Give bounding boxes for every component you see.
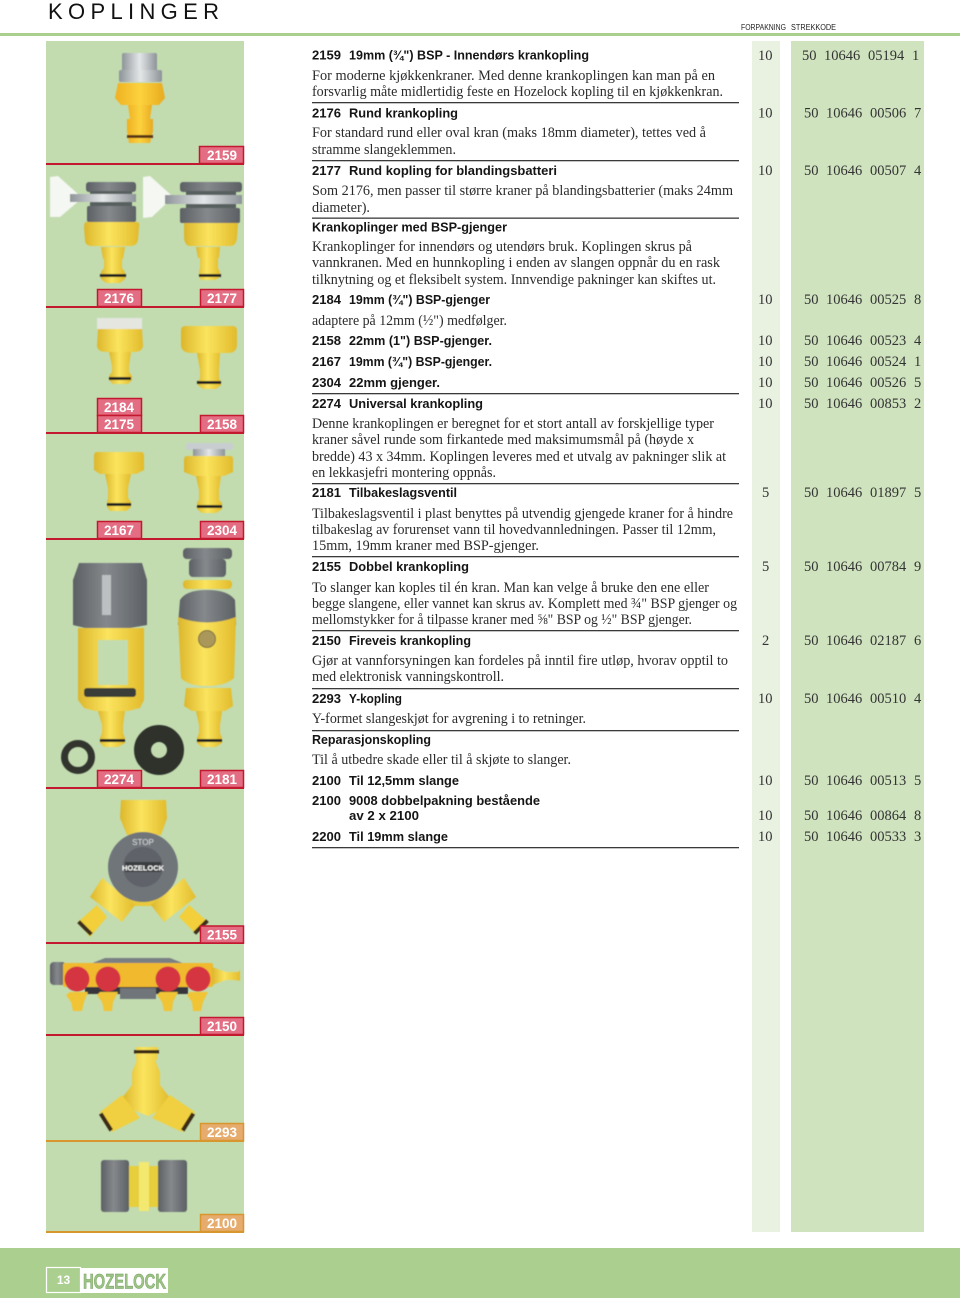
- label: 2177: [200, 290, 244, 306]
- entry: 2100 9008: av 2 x 2100: [349, 808, 419, 823]
- photo: 2176: [50, 176, 139, 283]
- entry: 2200: 00533: [870, 829, 906, 845]
- entry: 2304: 10646: [826, 375, 862, 391]
- entry: 2274: kraner såvel runde som firkantede med maksimumsmål på (høyde x: [312, 432, 695, 448]
- label: 2159: [200, 146, 244, 164]
- entry: 2167: 2167: [312, 354, 341, 369]
- entry: 2150: med elektronisk vanningskontroll.: [312, 669, 504, 685]
- entry: 2100 9008: 9008 dobbelpakning bestående: [349, 793, 540, 808]
- label: 2293: 2293: [207, 1125, 238, 1140]
- entry: 2184: 10: [758, 292, 772, 308]
- entry: 2159: 10: [758, 48, 772, 64]
- entry: 2155: begge slangene, eller vannet kan skrus av. Komplett med ¾" BSP gjenger og: [312, 596, 737, 612]
- logo: Hozelock: HOZELOCK: [83, 1270, 166, 1294]
- entry: 2176: 2176: [312, 106, 341, 120]
- entry: 2181: Tilbakeslagsventil: [349, 485, 457, 500]
- entry: 2181: 10646: [826, 485, 862, 501]
- entry: 2176: 00506: [870, 106, 906, 122]
- entry: 2167: 1: [914, 354, 921, 370]
- entry: 2181: 5: [762, 485, 769, 501]
- entry: 2100 12,5mm: 5: [914, 773, 921, 789]
- panel: barcode column: [791, 41, 924, 1232]
- label: 2181: [200, 770, 244, 788]
- label: 2167: 2167: [104, 523, 134, 538]
- label: 2150: [200, 1018, 244, 1034]
- entry: 2100 12,5mm: 00513: [870, 773, 906, 789]
- entry: 2159: 10646: [824, 48, 860, 64]
- entry: 2177: Rund kopling for blandingsbatteri: [349, 163, 557, 178]
- label: 2274: 2274: [104, 772, 135, 787]
- entry: 2274: 50: [804, 396, 818, 412]
- entry: 2158: 10646: [826, 333, 862, 349]
- page number: [46, 1268, 80, 1292]
- entry: 2293: 50: [804, 691, 818, 707]
- entry: 2167: 50: [804, 354, 818, 370]
- entry: 2176: Rund krankopling: [349, 106, 458, 120]
- entry: 2159: 2159: [312, 48, 341, 62]
- entry: 2100 12,5mm: 10: [758, 773, 772, 789]
- entry: 2159: 05194: [868, 48, 905, 64]
- entry: 2304: 5: [914, 375, 921, 391]
- header rule: [0, 33, 960, 36]
- label: 2159: 2159: [207, 148, 237, 163]
- entry: 2167: 00524: [870, 354, 907, 370]
- entry: 2158: 4: [914, 333, 922, 349]
- entry: 2158: 22mm (1") BSP-gjenger.: [349, 333, 492, 348]
- entry: 2274: 00853: [870, 396, 906, 412]
- entry: 2200: 50: [804, 829, 818, 845]
- entry: 2100 9008: 10: [758, 808, 772, 824]
- entry: 2158: 10: [758, 333, 772, 349]
- label: 2150: 2150: [207, 1019, 237, 1034]
- entry: 2176: 7: [914, 106, 921, 122]
- entry: 2150: [312, 633, 921, 685]
- label: 2181: 2181: [207, 772, 238, 787]
- entry: 2274: Denne krankoplingen er beregnet for et stort antall av forskjellige typer: [312, 416, 714, 432]
- logo: Hozelock: [80, 1268, 168, 1294]
- entry: 2200: 10: [758, 829, 772, 845]
- entry: 2167: 10646: [826, 354, 862, 370]
- page number: 13: [57, 1273, 70, 1287]
- entry: 2167: 10: [758, 354, 772, 370]
- entry: 2184: 10646: [826, 292, 862, 308]
- label: 2184: [98, 398, 142, 416]
- label: 2184: 2184: [104, 400, 135, 415]
- entry: 2293: 2293: [312, 691, 341, 706]
- entry: 2304: 50: [804, 375, 818, 391]
- entry: 2177: 10: [758, 163, 772, 179]
- entry: 2155: Dobbel krankopling: [349, 559, 469, 574]
- label: 2100: 2100: [207, 1216, 237, 1231]
- column headers: STREKKODE: [791, 23, 836, 32]
- label: 2175: [98, 416, 142, 432]
- entry: 2176: For standard rund eller oval kran (maks 18mm diameter), tettes ved å: [312, 125, 707, 141]
- entry: 2177: 00507: [870, 163, 906, 179]
- section: Krankoplinger med BSP-gjenger: Krankoplinger med BSP-gjenger: [312, 220, 507, 234]
- entry: 2200: [312, 829, 921, 845]
- section: Krankoplinger med BSP-gjenger: [312, 220, 721, 288]
- entry: 2181: 01897: [870, 485, 906, 501]
- photo: 2155: HOZELOCK: [122, 864, 165, 872]
- entry: 2150: 02187: [870, 633, 906, 649]
- panel: product photo column: [46, 41, 244, 1232]
- entry: 2155: 00784: [870, 559, 907, 575]
- section: Krankoplinger med BSP-gjenger: vannkranen. Med en hunnkopling i enden av slangen oppnår du en rask: [312, 255, 721, 271]
- entry: 2304: [312, 375, 921, 391]
- entry: 2274: 10646: [826, 396, 862, 412]
- entry: 2274: 10: [758, 396, 772, 412]
- entry: 2159: forsvarlig måte midlertidig feste en Hozelock kopling til en kjøkkenkran.: [312, 84, 723, 100]
- entry: 2274: [312, 396, 921, 481]
- entry: 2150: 6: [914, 633, 921, 649]
- photo: 2181: [178, 548, 236, 747]
- entry: 2181: 15mm, 19mm kraner med BSP-gjenger.: [312, 538, 539, 554]
- entry: 2100 12,5mm: 50: [804, 773, 818, 789]
- label: 2274: [98, 770, 142, 788]
- label: 2293: [200, 1124, 244, 1140]
- entry: 2177: Som 2176, men passer til større kraner på blandingsbatterier (maks 24mm: [312, 183, 734, 199]
- entry: 2159: 19mm (¾") BSP - Innendørs krankopling: [349, 48, 589, 62]
- entry: 2100 12,5mm: [312, 773, 921, 789]
- entry: 2155: 9: [914, 559, 921, 575]
- section: Reparasjonskopling: [312, 732, 571, 768]
- entry: 2158: 2158: [312, 333, 341, 348]
- entry: 2293: Y-kopling: [349, 691, 402, 706]
- entry: 2150: 2: [762, 633, 769, 649]
- entry: 2159: For moderne kjøkkenkraner. Med denne krankoplingen kan man på en: [312, 68, 716, 84]
- entry: 2274: en lekkasjefri montering oppnås.: [312, 465, 496, 481]
- entry: 2274: 2274: [312, 396, 342, 411]
- entry: 2200: 3: [914, 829, 921, 845]
- entry: 2304: 10: [758, 375, 772, 391]
- entry: 2304: 2304: [312, 375, 342, 390]
- entry: 2293: 4: [914, 691, 922, 707]
- entry: 2155: 10646: [826, 559, 862, 575]
- label: 2100: [200, 1214, 244, 1232]
- label: 2158: [200, 416, 244, 432]
- photo: 2150: [50, 958, 240, 1011]
- photo: 2155: [77, 800, 209, 937]
- entry: 2181: [312, 485, 921, 554]
- entry: 2200: 2200: [312, 829, 341, 844]
- entry: 2150: 2150: [312, 633, 341, 648]
- entry: 2158: [312, 333, 922, 349]
- column headers: FORPAKNING: [741, 23, 786, 32]
- label: 2155: [200, 926, 244, 943]
- label: 2167: [98, 522, 142, 538]
- entry: 2100 9008: 8: [914, 808, 921, 824]
- entry: 2184: 00525: [870, 292, 906, 308]
- entry: 2304: 00526: [870, 375, 906, 391]
- entry: 2100 9008: 10646: [826, 808, 862, 824]
- entry: 2184: 2184: [312, 292, 342, 307]
- entry: 2155: 2155: [312, 559, 341, 574]
- entry: 2274: Universal krankopling: [349, 396, 483, 411]
- entry: 2177: 50: [804, 163, 818, 179]
- entry: 2177: [312, 163, 922, 216]
- photo: 2158: [181, 326, 237, 389]
- entry: 2293: 00510: [870, 691, 906, 707]
- entry: 2100 12,5mm: 2100: [312, 773, 341, 788]
- section: Reparasjonskopling: Reparasjonskopling: [312, 732, 431, 747]
- entry: 2184: adaptere på 12mm (½") medfølger.: [312, 313, 507, 329]
- entry: 2100 9008: [312, 793, 921, 824]
- entry: 2181: 2181: [312, 485, 341, 500]
- entry: 2293: Y-formet slangeskjøt for avgrening i to retninger.: [312, 711, 586, 727]
- orange shelf lines: [46, 1140, 244, 1233]
- entry: 2100 9008: 00864: [870, 808, 907, 824]
- label: 2176: 2176: [104, 291, 135, 306]
- entry: 2158: 00523: [870, 333, 906, 349]
- entry: 2181: tilbakeslag av forurenset vann til hovedvannledningen. Passer til 12mm,: [312, 522, 716, 538]
- entry: 2100 9008: 50: [804, 808, 818, 824]
- entry: 2159: [312, 48, 919, 100]
- entry: 2159: 50: [802, 48, 816, 64]
- label: 2304: [200, 522, 244, 538]
- label: 2175: 2175: [104, 417, 135, 432]
- photo: 2184: [97, 318, 143, 384]
- photo: 2100: [101, 1160, 187, 1212]
- entry: 2274: 2: [914, 396, 921, 412]
- entry: 2176: stramme slangeklemmen.: [312, 142, 456, 158]
- entry: 2177: 10646: [826, 163, 862, 179]
- entry: 2100 12,5mm: Til 12,5mm slange: [349, 773, 459, 788]
- entry: 2155: [312, 559, 921, 628]
- product photos: [50, 53, 242, 1212]
- entry: 2184: 50: [804, 292, 818, 308]
- entry: 2293: [312, 691, 922, 727]
- entry: 2304: 22mm gjenger.: [349, 375, 440, 390]
- entry: 2158: 50: [804, 333, 818, 349]
- entry: 2155: 5: [762, 559, 769, 575]
- label: 2177: 2177: [207, 291, 237, 306]
- photo: 2177: [143, 176, 242, 280]
- label: 2155: 2155: [207, 928, 238, 942]
- entry: 2176: 10: [758, 106, 772, 122]
- entry: 2293: 10646: [826, 691, 862, 707]
- entry: 2274: bredde) 43 x 34mm. Koplingen leveres med et utvalg av pakninger slik at: [312, 449, 726, 465]
- entry: 2177: diameter).: [312, 200, 370, 216]
- entry: 2100 12,5mm: 10646: [826, 773, 862, 789]
- footer band: [0, 1248, 960, 1298]
- entry: 2167: [312, 354, 921, 370]
- entry: 2176: [312, 106, 921, 158]
- entry: 2181: Tilbakeslagsventil i plast benyttes på utvendig gjengede kraner for å hindre: [312, 506, 733, 522]
- photo: 2159: [115, 53, 165, 143]
- entry: 2167: 19mm (¾") BSP-gjenger.: [349, 354, 492, 369]
- entry: 2176: 50: [804, 106, 818, 122]
- entry: 2155: 50: [804, 559, 818, 575]
- entry: 2159: 1: [912, 48, 919, 64]
- photo: 2155: STOP: [132, 838, 154, 847]
- entry: 2184: 8: [914, 292, 921, 308]
- entry: 2150: 50: [804, 633, 818, 649]
- entry: 2184: 19mm (¾") BSP-gjenger: [349, 292, 490, 307]
- entry: 2184: [312, 292, 921, 329]
- photo: 2304: [184, 443, 233, 513]
- panel: package quantity column: [752, 41, 780, 1232]
- entry: 2150: Fireveis krankopling: [349, 633, 471, 648]
- label: 2176: [98, 290, 142, 306]
- shelf lines: [46, 163, 244, 1036]
- entry: 2177: 2177: [312, 163, 341, 178]
- entry: 2150: Gjør at vannforsyningen kan fordeles på inntil fire utløp, hvorav opptil to: [312, 653, 728, 669]
- entry: 2200: 10646: [826, 829, 862, 845]
- entry: 2200: Til 19mm slange: [349, 829, 448, 844]
- section: Krankoplinger med BSP-gjenger: Krankoplinger for innendørs og utendørs bruk. Koplingen skrus på: [312, 239, 693, 255]
- label: 2158: 2158: [207, 417, 238, 432]
- entry: 2155: To slanger kan koples til én kran. Man kan velge å bruke den ene eller: [312, 580, 709, 596]
- entry: 2100 9008: 2100: [312, 793, 341, 808]
- product number labels: [46, 146, 244, 1233]
- photo: 2274: [64, 563, 176, 770]
- entry: 2155: mellomstykker for å tilpasse kraner med ⅝" BSP og ½" BSP gjenger.: [312, 612, 692, 628]
- entry: 2150: 10646: [826, 633, 862, 649]
- entry: 2181: 50: [804, 485, 818, 501]
- column headers: [741, 23, 836, 32]
- entry: 2181: 5: [914, 485, 921, 501]
- label: 2304: 2304: [207, 523, 238, 538]
- section: Krankoplinger med BSP-gjenger: tilknytning og et fleksibelt system. Innvendige pakninger kan skiftes ut.: [312, 272, 716, 288]
- row rules: [312, 102, 739, 848]
- entry: 2177: 4: [914, 163, 922, 179]
- photo: 2293: [99, 1047, 195, 1132]
- photo: 2167: [94, 452, 144, 511]
- section: Reparasjonskopling: Til å utbedre skade eller til å skjøte to slanger.: [312, 752, 571, 768]
- entry: 2293: 10: [758, 691, 772, 707]
- entry: 2176: 10646: [826, 106, 862, 122]
